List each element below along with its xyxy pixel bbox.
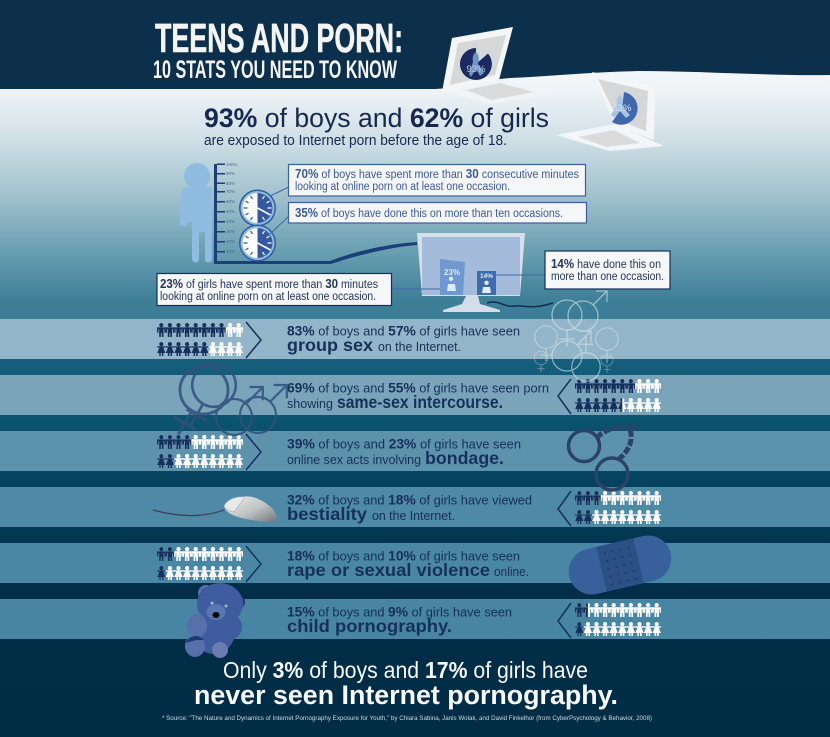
percentage axis: 30% xyxy=(226,229,235,234)
callout: 70% of boys xyxy=(288,164,586,196)
pictogram: boys and girls xyxy=(157,435,243,468)
statistic text: 15% of boys and 9% of girls have seen xyxy=(287,604,512,620)
headline sub-line: are exposed to Internet porn before the age of 18. xyxy=(204,132,507,149)
monitor xyxy=(417,233,553,312)
statistic text: child pornography. xyxy=(287,616,452,636)
connector lines for girls xyxy=(391,275,545,289)
callout: 23% of girls: 23% of girls have spent more than 30 minutes xyxy=(160,277,378,291)
statistic text xyxy=(287,436,521,468)
callout: 14% of girls xyxy=(545,251,670,289)
percentage axis: 100% xyxy=(226,162,238,167)
pictogram: boys and girls xyxy=(575,491,661,524)
callout: 23% of girls xyxy=(157,274,392,306)
statistic text xyxy=(287,492,532,524)
statistic text: on the Internet. xyxy=(378,339,461,354)
percentage axis: 60% xyxy=(226,199,235,204)
chevron xyxy=(558,379,571,414)
statistic text xyxy=(287,548,529,580)
icon: bandage xyxy=(564,531,676,599)
chevron xyxy=(246,434,261,470)
statistic text: 69% of boys and 55% of girls have seen porn xyxy=(287,380,549,396)
icon: dark gender symbols xyxy=(158,355,287,446)
chevron xyxy=(246,322,261,358)
band 5: rape or sexual violence xyxy=(0,543,830,583)
callout: 70% of boys: 70% of boys have spent more than 30 consecutive minutes xyxy=(295,167,579,181)
callout: 35% of boys xyxy=(288,202,586,223)
monitor: 14% xyxy=(480,273,493,280)
conclusion text xyxy=(194,657,618,710)
chevron xyxy=(246,546,261,582)
title: TEENS AND PORN: xyxy=(155,15,403,61)
statistic text: on the Internet. xyxy=(372,508,455,523)
percentage axis: 10% xyxy=(226,249,235,254)
statistic text: rape or sexual violence xyxy=(287,560,490,580)
clock: 70% xyxy=(239,190,276,226)
laptop: boys 93% xyxy=(438,27,560,104)
statistic text: same-sex intercourse. xyxy=(337,392,503,412)
callout: 35% of boys: 35% of boys have done this on more than ten occasions. xyxy=(295,206,563,220)
clock: 35% xyxy=(239,224,276,262)
percentage axis: 40% xyxy=(226,219,235,224)
icon: handcuffs xyxy=(568,427,637,490)
percentage axis: 80% xyxy=(226,181,235,186)
boy silhouette xyxy=(180,163,212,262)
background gradient xyxy=(0,70,830,330)
percentage axis: 20% xyxy=(226,239,235,244)
pictogram: boys and girls xyxy=(575,603,661,636)
callout: 14% of girls: 14% have done this on xyxy=(551,257,661,271)
band 2: same-sex intercourse xyxy=(0,375,830,415)
statistic text: online sex acts involving xyxy=(287,452,421,467)
statistic text xyxy=(287,380,549,412)
chevron xyxy=(558,603,571,638)
icon: teddy bear xyxy=(185,583,245,658)
band 4: bestiality xyxy=(0,487,830,527)
statistic text: 83% of boys and 57% of girls have seen xyxy=(287,322,520,338)
laptop: girls 62% xyxy=(556,72,664,151)
callout: 14% of girls: more than one occasion. xyxy=(551,271,664,283)
band 1: group sex xyxy=(0,319,830,359)
conclusion text: Only 3% of boys and 17% of girls have xyxy=(223,657,588,683)
percentage axis xyxy=(214,162,417,264)
statistic text: 32% of boys and 18% of girls have viewed xyxy=(287,492,532,508)
header banner xyxy=(0,0,830,89)
pictogram: boys and girls xyxy=(575,379,661,412)
headline statistic xyxy=(204,103,549,149)
statistic text: 18% of boys and 10% of girls have seen xyxy=(287,548,520,564)
callout: 23% of girls: looking at online porn on at least one occasion. xyxy=(160,291,376,303)
source note: * Source: "The Nature and Dynamics of Internet Pornography Exposure for Youth," by Chiara Sabina, Janis Wolak, and David Finkelhor (from CyberPsychology & Behavior, 2008) xyxy=(162,716,652,722)
connector lines xyxy=(270,187,289,234)
statistic text: 39% of boys and 23% of girls have seen xyxy=(287,436,521,452)
subtitle: 10 STATS YOU NEED TO KNOW xyxy=(153,56,397,84)
conclusion emphasis: never seen Internet pornography. xyxy=(194,680,618,710)
percentage axis: 50% xyxy=(226,209,235,214)
headline statistic: 93% of boys and 62% of girls xyxy=(204,103,549,133)
statistic text: online. xyxy=(494,564,529,579)
lower dark background xyxy=(0,319,830,737)
pictogram: boys and girls xyxy=(157,547,243,580)
callout: 70% of boys: looking at online porn on at least one occasion. xyxy=(295,181,510,193)
percentage axis: 70% xyxy=(226,189,235,194)
statistic text xyxy=(287,604,512,636)
title xyxy=(153,15,403,84)
statistic text: showing xyxy=(287,396,333,411)
icon: light gender symbols xyxy=(534,291,618,381)
statistic text: bondage. xyxy=(425,448,504,468)
icon: computer mouse xyxy=(153,496,277,522)
percentage axis: 90% xyxy=(226,171,235,176)
chevron xyxy=(558,491,571,526)
pictogram: boys and girls xyxy=(157,323,243,356)
band 3: bondage xyxy=(0,431,830,471)
band 6: child pornography xyxy=(0,599,830,639)
statistic text xyxy=(287,322,520,355)
laptop: boys 93%: 93% xyxy=(466,64,486,75)
statistic text: bestiality xyxy=(287,504,367,524)
laptop: girls 62%: 62% xyxy=(612,103,632,114)
monitor: 23% xyxy=(444,268,460,277)
statistic text: group sex xyxy=(287,335,373,355)
